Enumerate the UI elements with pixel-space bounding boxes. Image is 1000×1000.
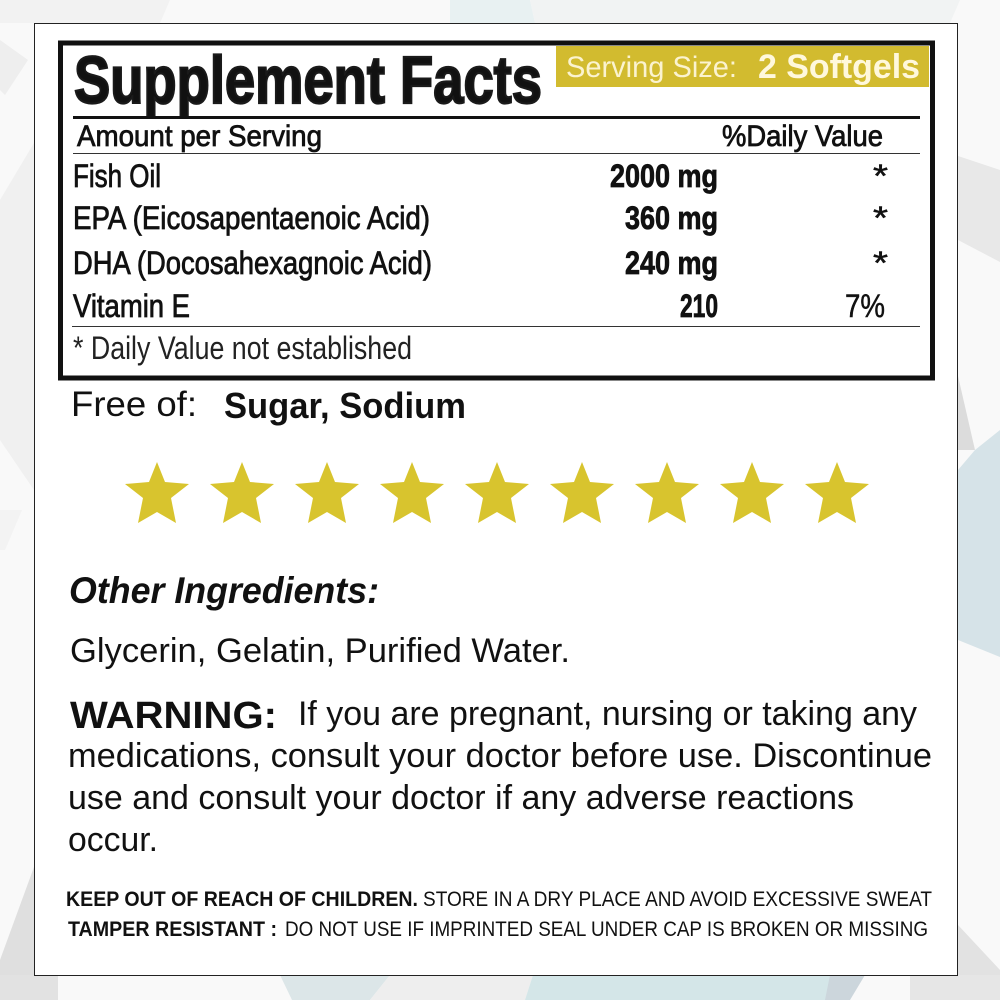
row: fish oil — [73, 158, 888, 194]
row rule — [73, 153, 920, 154]
footer rule — [72, 326, 920, 327]
warning block: medications, consult your doctor before use. Discontinue — [68, 737, 932, 775]
row: vitamin E — [73, 288, 885, 324]
heading: other ingredients: Other Ingredients: — [69, 570, 379, 611]
row: EPA: 360 mg — [625, 200, 718, 236]
storage and safety notes — [66, 888, 932, 941]
row: fish oil: Fish Oil — [73, 158, 161, 194]
warning block: If you are pregnant, nursing or taking any — [298, 695, 917, 733]
free of line — [71, 385, 466, 426]
header rule — [73, 116, 920, 119]
warning block — [68, 695, 932, 859]
storage and safety notes: STORE IN A DRY PLACE AND AVOID EXCESSIVE SWEAT — [423, 888, 932, 911]
footnote: * Daily Value not established — [73, 330, 412, 366]
row: vitamin E: Vitamin E — [73, 288, 190, 324]
storage and safety notes: DO NOT USE IF IMPRINTED SEAL UNDER CAP IS BROKEN OR MISSING — [285, 918, 928, 941]
warning block: WARNING: — [70, 695, 277, 737]
row: fish oil: 2000 mg — [610, 158, 718, 194]
title: Supplement Facts: Supplement Facts — [74, 43, 542, 118]
star rating row — [125, 462, 869, 523]
row: fish oil: * — [873, 158, 888, 194]
free of line: Sugar, Sodium — [224, 385, 466, 426]
storage and safety notes: TAMPER RESISTANT : — [68, 918, 277, 941]
ingredients list: Glycerin, Gelatin, Purified Water. — [70, 632, 570, 670]
storage and safety notes: KEEP OUT OF REACH OF CHILDREN. — [66, 888, 418, 911]
serving size banner: 2 Softgels — [758, 48, 920, 86]
warning block: use and consult your doctor if any adverse reactions — [68, 779, 854, 817]
row: DHA: * — [873, 245, 888, 281]
serving size banner: Serving Size: — [566, 51, 737, 84]
row: vitamin E: 210 — [680, 288, 718, 324]
serving size banner — [556, 46, 929, 87]
row: DHA: DHA (Docosahexagnoic Acid) — [73, 245, 432, 281]
supplement facts table — [60, 43, 932, 378]
table border — [60, 43, 932, 378]
warning block: occur. — [68, 821, 158, 859]
row: EPA: EPA (Eicosapentaenoic Acid) — [73, 200, 430, 236]
free of line: Free of: — [71, 385, 197, 424]
row: DHA: 240 mg — [625, 245, 718, 281]
row: vitamin E: 7% — [845, 288, 885, 324]
column heading: daily value: %Daily Value — [722, 120, 883, 153]
row: EPA — [73, 200, 888, 236]
row: DHA — [73, 245, 888, 281]
column heading: amount per serving: Amount per Serving — [77, 120, 322, 153]
row: EPA: * — [873, 200, 888, 236]
